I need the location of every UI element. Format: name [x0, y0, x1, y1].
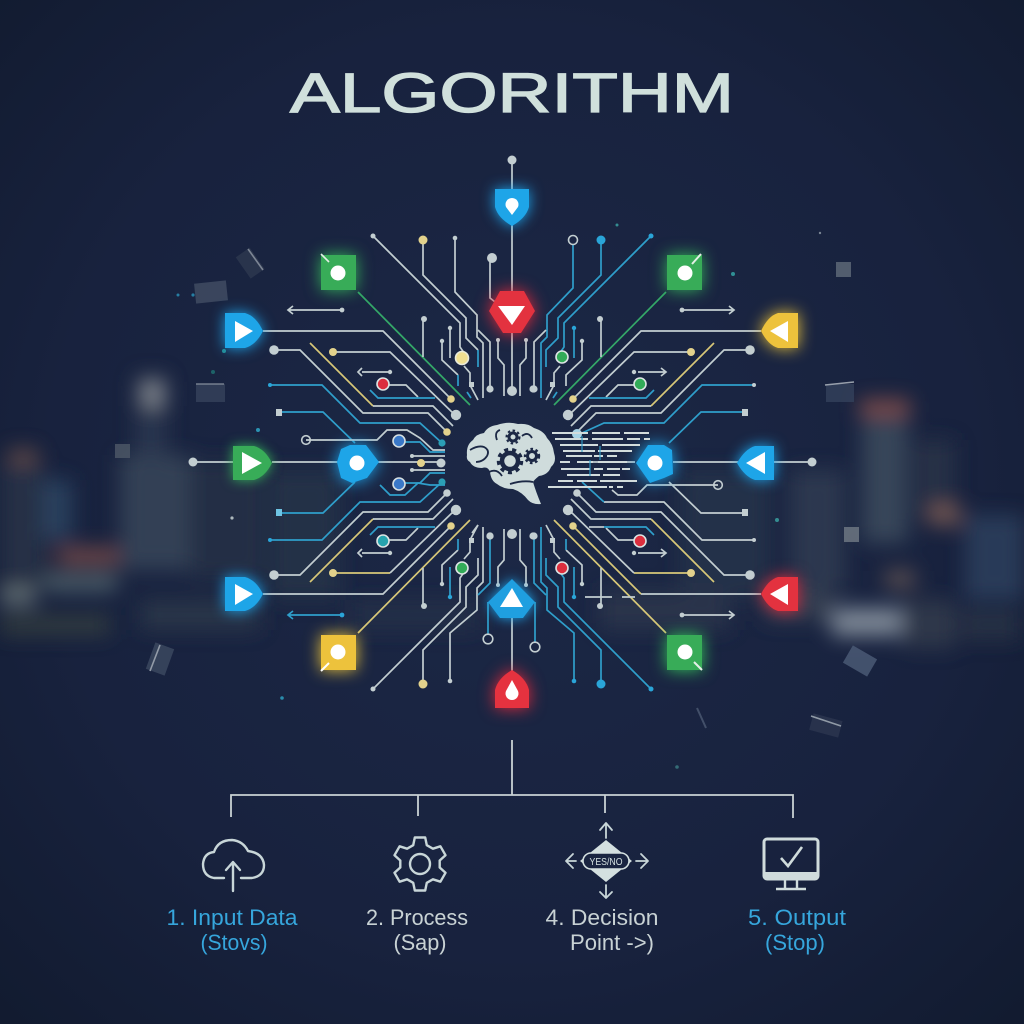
step 1: input data — [166, 840, 298, 955]
label: stovs: (Stovs) — [200, 930, 268, 955]
node: blue triangle bottom — [488, 579, 535, 618]
node: yellow play upper-right — [761, 313, 798, 348]
icon: monitor check — [764, 839, 818, 889]
circuit traces: bottom-right quadrant — [520, 481, 761, 692]
circuit traces: top-right quadrant — [520, 234, 761, 443]
label: sap: (Sap) — [394, 930, 446, 955]
cross mark detail — [585, 596, 635, 598]
node: yellow square bottom-left — [321, 635, 356, 671]
label: point: Point ->) — [570, 930, 654, 955]
node: blue play upper-left — [225, 313, 263, 348]
node: bottom pin red — [495, 670, 529, 708]
axis lines: vertical and horizontal spokes — [188, 156, 816, 672]
circuit traces: top-left quadrant — [263, 234, 504, 452]
circuit traces: bottom-left quadrant — [263, 473, 504, 692]
central brain icon — [467, 423, 555, 504]
step 5: output — [748, 839, 846, 955]
node: green square bottom-right — [667, 635, 702, 670]
node: green square top-right — [667, 254, 702, 290]
label: input data: 1. Input Data — [166, 905, 298, 930]
label: decision: 4. Decision — [546, 905, 658, 930]
blurred city skyline — [0, 375, 1024, 648]
node: blue hexagon left — [337, 445, 379, 483]
node: red diamond — [489, 291, 535, 333]
floating debris — [115, 224, 877, 769]
node: red play lower-right — [761, 577, 798, 611]
node: top pin blue — [495, 189, 529, 226]
node: blue hexagon right — [636, 445, 673, 483]
icon: cloud upload — [203, 840, 264, 891]
icon: gear — [394, 838, 446, 890]
icon: decision diamond: YES/NO — [590, 857, 623, 868]
label: output: 5. Output — [748, 905, 846, 930]
bottom tree connector — [231, 740, 793, 818]
label: stop: (Stop) — [765, 930, 825, 955]
label: process: 2. Process — [366, 905, 468, 930]
step 4: decision point — [546, 823, 658, 955]
step 2: process — [366, 838, 468, 955]
code lines beside brain — [548, 433, 650, 487]
node: blue play lower-left — [225, 577, 263, 611]
node: green play left — [233, 446, 272, 480]
node: blue play right — [737, 446, 774, 480]
title: ALGORITHM — [290, 61, 734, 124]
node: green square top-left — [321, 254, 356, 290]
